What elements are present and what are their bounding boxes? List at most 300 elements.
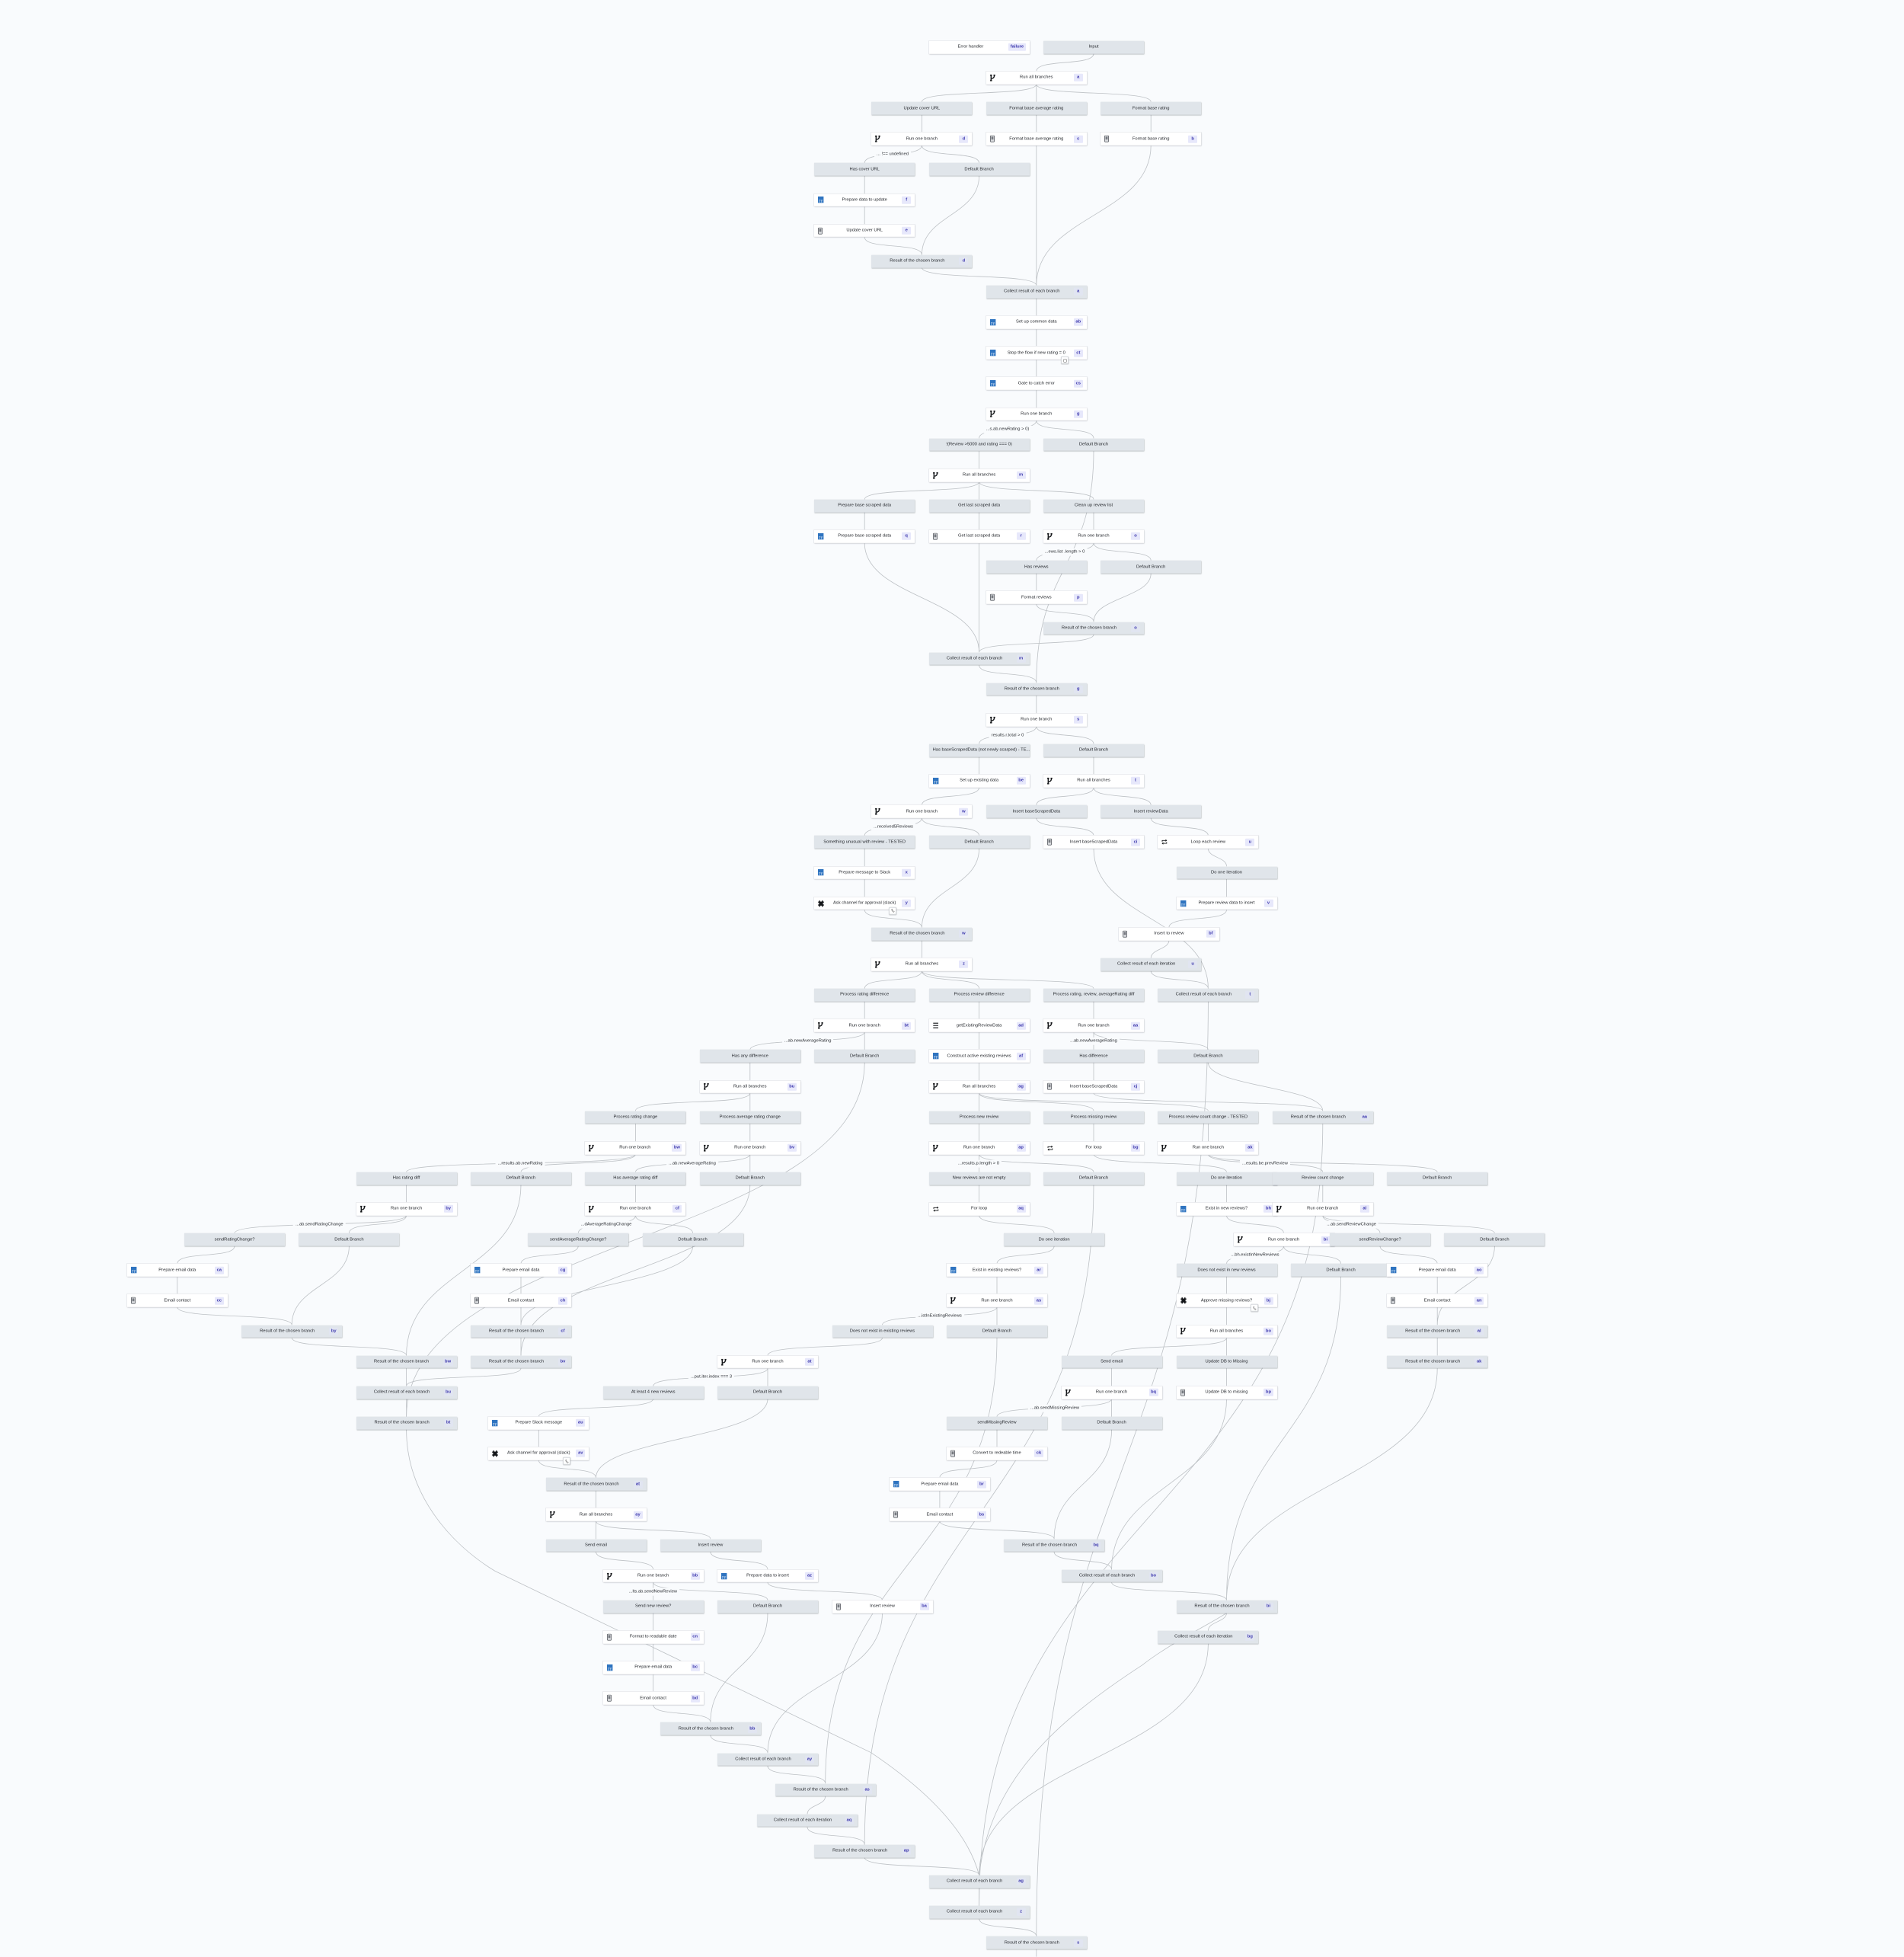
node: Collect t: t bbox=[1249, 993, 1251, 997]
node: Collect iteration aq bbox=[757, 1814, 858, 1827]
icon: fork bbox=[818, 1022, 823, 1029]
edge label bbox=[1324, 1221, 1378, 1229]
node: Default Branch bbox=[1158, 1050, 1258, 1063]
icon: fork bbox=[1276, 1206, 1286, 1213]
node: getExistingReviewData ad bbox=[929, 1019, 1030, 1032]
node: Collect iteration aq: aq bbox=[847, 1818, 851, 1823]
node: Prepare data to insert az: az bbox=[807, 1574, 812, 1578]
node: Result s bbox=[986, 1936, 1087, 1949]
node: Run one branch al bbox=[1273, 1203, 1373, 1215]
node: Set up common data ab: Set up common data bbox=[1016, 320, 1057, 325]
node: Has any difference: Has any difference bbox=[732, 1054, 768, 1058]
node: Run all branches m bbox=[929, 468, 1030, 481]
node: Loop each review u: Loop each review bbox=[1191, 839, 1225, 844]
node: Result bb: bb bbox=[749, 1726, 755, 1731]
icon: database bbox=[607, 1695, 616, 1702]
node: Has difference bbox=[1043, 1050, 1144, 1063]
node: Result d: d bbox=[963, 259, 965, 264]
node: Collect m: m bbox=[1019, 657, 1023, 661]
node: Prepare message to Slack x bbox=[814, 866, 915, 879]
node: Process rating change bbox=[585, 1111, 685, 1124]
edge label: ...ab.newAverageRating bbox=[784, 1039, 831, 1044]
node: Get last scraped data bbox=[929, 500, 1030, 512]
node: Collect iteration u: u bbox=[1191, 962, 1194, 967]
node: Run one branch bw: Run one branch bbox=[619, 1146, 650, 1150]
node: Do one iteration bbox=[1176, 1172, 1276, 1185]
node: Format to readable date cn bbox=[603, 1631, 704, 1643]
node: Send new review: Send new review? bbox=[635, 1604, 671, 1609]
node: Default Branch bbox=[717, 1600, 818, 1613]
node: Email contact ch: ch bbox=[561, 1298, 565, 1303]
node: Insert review: Insert review bbox=[698, 1543, 723, 1548]
icon: database bbox=[1391, 1297, 1400, 1304]
node: Result cf: Result of the chosen branch bbox=[489, 1329, 544, 1334]
edge label bbox=[1240, 1159, 1290, 1167]
icon: fork bbox=[1065, 1389, 1075, 1396]
node: Default Branch bbox=[1101, 561, 1201, 574]
icon: slack bbox=[492, 1450, 501, 1457]
icon: fork bbox=[721, 1358, 730, 1365]
node: Construct active existing reviews af: Construct active existing reviews bbox=[947, 1054, 1011, 1058]
icon: TS bbox=[990, 318, 996, 326]
node: Email contact bd: bd bbox=[692, 1696, 698, 1700]
node: Exist in existing reviews ar bbox=[947, 1264, 1047, 1277]
node: Process rating difference bbox=[814, 989, 915, 1002]
node: For loop bg: bg bbox=[1132, 1146, 1138, 1150]
connectors: branch conditions and long merge lines bbox=[407, 1002, 1437, 1936]
edge label bbox=[871, 823, 915, 830]
node: Process missing review: Process missing review bbox=[1071, 1115, 1117, 1120]
node: Email contact bs: bs bbox=[979, 1512, 984, 1517]
node: Insert baseScrapedData cj: Insert baseScrapedData bbox=[1070, 1085, 1117, 1089]
icon: fork bbox=[704, 1144, 709, 1152]
node: Default Branch: Default Branch bbox=[1079, 748, 1108, 753]
node: Has cover URL: Has cover URL bbox=[850, 167, 880, 171]
node: Approve missing reviews bj: bj bbox=[1267, 1298, 1270, 1303]
icon: fork bbox=[950, 1297, 960, 1304]
node: Prepare message to Slack x: x bbox=[906, 871, 908, 875]
node: Convert to redeable time ck: ck bbox=[1037, 1451, 1041, 1456]
node: Collect iteration aq: Collect result of each iteration bbox=[774, 1818, 832, 1823]
node: Has rating diff: Has rating diff bbox=[393, 1176, 420, 1181]
node: Prepare data to insert az bbox=[717, 1569, 818, 1582]
node: Send email: Send email bbox=[585, 1543, 607, 1548]
icon: database bbox=[893, 1511, 902, 1518]
node: Prepare email data ca bbox=[127, 1264, 228, 1277]
node: Run one branch bt bbox=[814, 1019, 915, 1032]
node: Run one branch bq: Run one branch bbox=[1096, 1390, 1127, 1395]
node: Prepare Slack message au: au bbox=[578, 1421, 583, 1425]
node: condition review over 5000: !(Review >5000 and rating === 0) bbox=[946, 443, 1012, 447]
edge label: ...ab.sendMissingReview bbox=[1030, 1405, 1079, 1410]
node: Run one branch bt: Run one branch bbox=[849, 1023, 880, 1028]
node: Prepare review data to insert v bbox=[1176, 897, 1276, 910]
node: Result al: al bbox=[1478, 1329, 1481, 1334]
node: Does not exist in new reviews bbox=[1176, 1264, 1276, 1277]
node: Result g bbox=[986, 683, 1087, 696]
node: Prepare base scraped data q bbox=[814, 530, 915, 543]
node: Error handler bbox=[929, 41, 1030, 53]
node: Process review count change bbox=[1158, 1111, 1258, 1124]
edge label bbox=[293, 1221, 346, 1229]
edge label: ...lts.ab.sendNewReview bbox=[629, 1589, 677, 1594]
node: Default Branch: Default Branch bbox=[506, 1176, 535, 1181]
node: Run one branch d bbox=[871, 133, 972, 145]
node: Collect iteration bg: Collect result of each iteration bbox=[1174, 1635, 1233, 1639]
edge label bbox=[989, 731, 1026, 739]
node: Insert to review bf: bf bbox=[1209, 932, 1213, 936]
node: Email contact an: an bbox=[1477, 1298, 1482, 1303]
edge label bbox=[915, 1313, 964, 1320]
node: Email contact ch: Email contact bbox=[508, 1298, 534, 1303]
node: Default Branch bbox=[700, 1172, 800, 1185]
node: Do one iteration bbox=[1176, 866, 1276, 879]
node: Insert review ba: Insert review bbox=[870, 1604, 895, 1609]
node: Email contact ch bbox=[471, 1294, 571, 1307]
node: Insert baseScrapedData ci: Insert baseScrapedData bbox=[1070, 839, 1117, 844]
node: Default Branch bbox=[1062, 1417, 1162, 1429]
node: Exist in new reviews bh: bh bbox=[1266, 1207, 1271, 1211]
icon: database bbox=[990, 594, 995, 601]
node: Result by: by bbox=[331, 1329, 337, 1334]
node: Result aa: Result of the chosen branch bbox=[1291, 1115, 1346, 1120]
node: Result o bbox=[1043, 622, 1144, 635]
icon: fork bbox=[990, 410, 995, 417]
node: Run all branches a: a bbox=[1077, 75, 1079, 80]
node: Run one branch cf: Run one branch bbox=[620, 1207, 651, 1211]
node: Insert baseScrapedData cj: cj bbox=[1134, 1085, 1137, 1089]
node: For loop aq: For loop bbox=[971, 1207, 987, 1211]
node: Result al bbox=[1387, 1325, 1487, 1338]
node: Collect a bbox=[986, 286, 1087, 298]
edge label: ...ews.list .length > 0 bbox=[1045, 549, 1085, 554]
node: sendRatingChange: sendRatingChange? bbox=[215, 1237, 254, 1242]
node: Set up existing data be: be bbox=[1018, 779, 1024, 783]
icon: fork bbox=[990, 75, 995, 82]
node: Result o: Result of the chosen branch bbox=[1062, 626, 1117, 631]
icon: TS bbox=[818, 533, 824, 539]
node: Prepare email data ao bbox=[1387, 1264, 1487, 1277]
node: Run one branch g bbox=[986, 408, 1087, 420]
icon: database bbox=[1047, 1083, 1052, 1090]
node: Result s: Result of the chosen branch bbox=[1005, 1940, 1059, 1945]
node: Default Branch: Default Branch bbox=[1326, 1268, 1356, 1272]
node: Default Branch bbox=[947, 1325, 1047, 1338]
node: Run one branch bi bbox=[1234, 1233, 1334, 1246]
node: Ask channel av: av bbox=[578, 1451, 583, 1456]
icon: fork bbox=[360, 1205, 366, 1213]
node: Run one branch bv: bv bbox=[789, 1146, 794, 1150]
node: Result d bbox=[871, 254, 972, 267]
node: Prepare email data ca: Prepare email data bbox=[158, 1268, 196, 1272]
node: Prepare data to insert az: Prepare data to insert bbox=[746, 1574, 789, 1578]
node: sendRatingChange bbox=[184, 1233, 285, 1246]
node: Collect iteration bg: bg bbox=[1248, 1635, 1253, 1639]
node: Collect bo: bo bbox=[1151, 1574, 1156, 1578]
node: Format base rating: Format base rating bbox=[1132, 106, 1170, 110]
node: Prepare email data br: br bbox=[979, 1482, 984, 1486]
edge label: ...received5Reviews bbox=[874, 824, 913, 829]
node: Convert to redeable time ck: Convert to redeable time bbox=[973, 1451, 1021, 1456]
node: Ask channel av bbox=[488, 1447, 589, 1460]
node: Prepare email data br: Prepare email data bbox=[921, 1482, 958, 1486]
node: Insert review ba: ba bbox=[922, 1604, 927, 1609]
node: getExistingReviewData ad: ad bbox=[1018, 1023, 1024, 1028]
node: Run all branches z: Run all branches bbox=[906, 962, 938, 967]
node: Default Branch: Default Branch bbox=[334, 1237, 364, 1242]
icon: fork bbox=[875, 136, 880, 142]
node: Run one branch bq bbox=[1062, 1386, 1162, 1399]
node: Update cover URL bbox=[871, 102, 972, 115]
icon: fork bbox=[933, 1144, 938, 1152]
node: sendReviewChange bbox=[1330, 1233, 1430, 1246]
icon: TS bbox=[607, 1664, 616, 1671]
node: Format base rating b: b bbox=[1191, 136, 1194, 141]
node: Result g: g bbox=[1077, 687, 1080, 692]
node: Result aa: aa bbox=[1363, 1115, 1367, 1120]
node: Process review difference: Process review difference bbox=[954, 993, 1005, 997]
node: Convert to redeable time ck bbox=[947, 1447, 1047, 1460]
edge label bbox=[782, 1038, 833, 1045]
icon: TS bbox=[131, 1267, 140, 1274]
node: Construct active existing reviews af bbox=[929, 1050, 1030, 1063]
node: Email contact bs bbox=[890, 1508, 990, 1521]
node: Clean up review list bbox=[1043, 500, 1144, 512]
node: Prepare data to update f: Prepare data to update bbox=[842, 198, 887, 203]
node: Insert baseScrapedData bbox=[986, 805, 1087, 818]
node: Update cover URL: Update cover URL bbox=[904, 106, 940, 110]
node: Result w: w bbox=[962, 932, 966, 936]
node: Default Branch bbox=[1444, 1233, 1545, 1246]
badge: call bbox=[1251, 1304, 1258, 1312]
node: Run all branches bu bbox=[700, 1080, 800, 1093]
edge label bbox=[984, 426, 1031, 433]
node: Run all branches bo bbox=[1176, 1325, 1276, 1338]
node: Set up existing data be: Set up existing data bbox=[960, 779, 998, 783]
node: Has baseScrapedData: Has baseScrapedData (not newly scarped) - TE... bbox=[933, 748, 1030, 753]
node: Run all branches ag bbox=[929, 1080, 1030, 1093]
node: sendAverageRatingChange bbox=[528, 1233, 628, 1246]
node: Run one branch ak: ak bbox=[1248, 1146, 1253, 1150]
node: Update DB to missing bp: bp bbox=[1266, 1390, 1271, 1395]
edge label bbox=[627, 1588, 679, 1595]
node: Stop the flow ct bbox=[986, 347, 1087, 360]
node: Prepare base scraped data q: q bbox=[905, 534, 908, 539]
icon: fork bbox=[875, 961, 880, 968]
node: Default Branch: Default Branch bbox=[736, 1176, 765, 1181]
node: Email contact bd: Email contact bbox=[640, 1696, 666, 1700]
node: Process rating difference: Process rating difference bbox=[840, 993, 889, 997]
node: Email contact an: Email contact bbox=[1424, 1298, 1451, 1303]
node: Run all branches bu: bu bbox=[789, 1085, 794, 1089]
icon: TS bbox=[933, 1053, 938, 1059]
node: Prepare email data bc: bc bbox=[692, 1665, 698, 1670]
node: Collect ag bbox=[929, 1875, 1030, 1888]
node: Result ak bbox=[1387, 1355, 1487, 1368]
icon: database bbox=[1180, 1389, 1190, 1396]
icon: database bbox=[131, 1297, 140, 1304]
node: Result o: o bbox=[1134, 626, 1137, 631]
node: Run all branches ay bbox=[545, 1508, 646, 1521]
node: Result bq: Result of the chosen branch bbox=[1022, 1543, 1077, 1548]
node: Insert review ba bbox=[832, 1600, 932, 1613]
node: Prepare email data bc: Prepare email data bbox=[634, 1665, 672, 1670]
icon: database bbox=[950, 1450, 960, 1457]
edge label bbox=[1028, 1404, 1081, 1412]
node: Process average rating change bbox=[700, 1111, 800, 1124]
node: Has any difference bbox=[700, 1050, 800, 1063]
node: Run one branch bb bbox=[603, 1569, 704, 1582]
node: Send email bbox=[545, 1539, 646, 1552]
node: Ask channel y bbox=[814, 897, 915, 910]
node: For loop bg: For loop bbox=[1085, 1146, 1102, 1150]
icon: fork bbox=[589, 1206, 598, 1213]
node: Prepare email data cg: cg bbox=[561, 1268, 565, 1272]
node: Ask channel av: Ask channel for approval (slack) bbox=[507, 1451, 570, 1456]
connectors: send change and email sections bbox=[177, 1216, 1494, 1600]
node: Format reviews p: p bbox=[1077, 595, 1080, 600]
badge: stop bbox=[1060, 357, 1068, 364]
node: Run one branch d: Run one branch bbox=[906, 136, 938, 141]
node: Run one branch al: Run one branch bbox=[1307, 1207, 1338, 1211]
node: Collect t bbox=[1158, 989, 1258, 1002]
node: Prepare email data br bbox=[890, 1478, 990, 1491]
edge label: ...esults.be.prevReview bbox=[1242, 1161, 1288, 1166]
node: Format base average rating c bbox=[986, 133, 1087, 145]
node: Run one branch at: Run one branch bbox=[752, 1360, 784, 1364]
node: Run one branch bb: bb bbox=[692, 1574, 698, 1578]
connectors: existing data and insert section bbox=[864, 726, 1226, 989]
node: Input: Input bbox=[1089, 45, 1098, 50]
node: Process new review bbox=[929, 1111, 1030, 1124]
node: Has reviews: Has reviews bbox=[1024, 564, 1049, 569]
node: Has baseScrapedData bbox=[929, 744, 1030, 756]
node: Insert reviewData: Insert reviewData bbox=[1134, 809, 1168, 814]
icon: fork bbox=[933, 472, 938, 479]
node: Result ak: ak bbox=[1477, 1360, 1481, 1364]
node: Review count change: Review count change bbox=[1302, 1176, 1344, 1181]
node: Run one branch as: as bbox=[1037, 1298, 1041, 1303]
edge label bbox=[874, 151, 911, 158]
icon: database bbox=[1047, 838, 1052, 846]
node: Run one branch g: Run one branch bbox=[1021, 412, 1052, 417]
node: Run one branch ak bbox=[1158, 1141, 1258, 1154]
node: For loop bg bbox=[1043, 1141, 1144, 1154]
node: Collect ay: ay bbox=[807, 1757, 812, 1762]
node: Default Branch bbox=[1291, 1264, 1391, 1277]
node: Collect a: a bbox=[1077, 289, 1079, 294]
node: Run one branch s: Run one branch bbox=[1021, 718, 1052, 722]
node: Prepare base scraped data: Prepare base scraped data bbox=[838, 504, 891, 508]
node: Does not exist in existing reviews: Does not exist in existing reviews bbox=[850, 1329, 915, 1334]
node: Collect bu bbox=[356, 1386, 457, 1399]
icon: fork bbox=[990, 716, 995, 724]
node: Get last scraped data r: Get last scraped data bbox=[958, 534, 1000, 539]
node: Insert baseScrapedData cj bbox=[1043, 1080, 1144, 1093]
node: Result bb: Result of the chosen branch bbox=[679, 1726, 733, 1731]
node: Run one branch bt: bt bbox=[904, 1023, 909, 1028]
node: Run one branch o bbox=[1043, 530, 1144, 543]
icon: TS bbox=[1391, 1267, 1400, 1274]
edge label: ...results.ab.newRating bbox=[498, 1161, 542, 1166]
icon: fork bbox=[607, 1572, 616, 1579]
icon: TS bbox=[492, 1420, 501, 1427]
connectors: input and cover URL section bbox=[864, 53, 1151, 286]
edge label bbox=[666, 1159, 718, 1167]
node: Result cf: cf bbox=[561, 1329, 565, 1334]
node: Update cover URL e bbox=[814, 224, 915, 237]
node: Result by: Result of the chosen branch bbox=[260, 1329, 315, 1334]
edge label bbox=[1043, 548, 1087, 555]
node: Has average rating diff: Has average rating diff bbox=[613, 1176, 658, 1181]
node: Default Branch bbox=[717, 1386, 818, 1399]
edge label: ...put.iter.index === 3 bbox=[691, 1375, 732, 1380]
icon: fork bbox=[1047, 533, 1053, 540]
edge label: ...ab.newAverageRating bbox=[1070, 1039, 1117, 1044]
node: Run one branch o: Run one branch bbox=[1078, 534, 1110, 539]
node: Result bv: bv bbox=[561, 1360, 565, 1364]
node: Stop the flow ct: Stop the flow if new rating = 0 bbox=[1008, 350, 1065, 355]
node: Format base average rating: Format base average rating bbox=[1009, 106, 1063, 110]
node: Run one branch ap: Run one branch bbox=[963, 1146, 995, 1150]
node: Run one branch by bbox=[356, 1203, 457, 1215]
node: Run one branch bv: Run one branch bbox=[734, 1146, 765, 1150]
node: Prepare base scraped data bbox=[814, 500, 915, 512]
edge label: ...s.ab.newRating > 0) bbox=[986, 427, 1029, 432]
icon: list bbox=[933, 1022, 938, 1028]
icon: database bbox=[836, 1603, 845, 1610]
connectors: new review section down to the final merge bbox=[407, 1307, 1037, 1936]
node: Prepare email data ao: ao bbox=[1477, 1268, 1482, 1272]
node: Run all branches ay: Run all branches bbox=[580, 1512, 612, 1517]
node: Result by bbox=[241, 1325, 342, 1338]
node: Exist in existing reviews ar: Exist in existing reviews? bbox=[973, 1268, 1021, 1272]
node: Ask channel y: Ask channel for approval (slack) bbox=[833, 901, 896, 906]
node: Result bv: Result of the chosen branch bbox=[489, 1360, 544, 1364]
icon: TS bbox=[721, 1572, 730, 1579]
node: Prepare email data ca: ca bbox=[217, 1268, 222, 1272]
node: Has reviews bbox=[986, 561, 1087, 574]
node: Error handler: Error handler bbox=[957, 45, 983, 50]
node: Set up common data ab: ab bbox=[1075, 320, 1081, 325]
edge label: ...istInExistingReviews bbox=[918, 1314, 962, 1319]
node: Collect bo bbox=[1062, 1569, 1162, 1582]
icon: fork bbox=[1180, 1328, 1190, 1335]
node: Default Branch: Default Branch bbox=[850, 1054, 879, 1058]
node: Update DB to missing bp bbox=[1176, 1386, 1276, 1399]
node: Prepare message to Slack x: Prepare message to Slack bbox=[839, 871, 890, 875]
icon: TS bbox=[933, 777, 938, 785]
node: Format base average rating c: c bbox=[1077, 136, 1079, 141]
icon: database bbox=[1123, 931, 1127, 938]
node: Result w: Result of the chosen branch bbox=[890, 932, 944, 936]
node: Default Branch bbox=[1387, 1172, 1487, 1185]
node: Get last scraped data r: r bbox=[1020, 534, 1022, 539]
node: Run one branch by: Run one branch bbox=[391, 1207, 422, 1211]
node: Prepare email data ao: Prepare email data bbox=[1419, 1268, 1456, 1272]
icon: fork bbox=[550, 1511, 559, 1518]
connectors: gating and scraped data section bbox=[864, 299, 1151, 714]
icon: loop bbox=[933, 1206, 942, 1213]
edge label: ...results.p.length > 0 bbox=[958, 1161, 999, 1166]
node: Prepare data to update f: f bbox=[906, 198, 907, 203]
node: Do one iteration: Do one iteration bbox=[1211, 871, 1242, 875]
node: Collect ay bbox=[717, 1753, 818, 1766]
node: Default Branch: Default Branch bbox=[1097, 1421, 1126, 1425]
icon: database bbox=[474, 1297, 484, 1304]
node: Process rating review averageRating diff: Process rating, review, averageRating diff bbox=[1053, 993, 1134, 997]
node: Loop each review u bbox=[1158, 836, 1258, 849]
